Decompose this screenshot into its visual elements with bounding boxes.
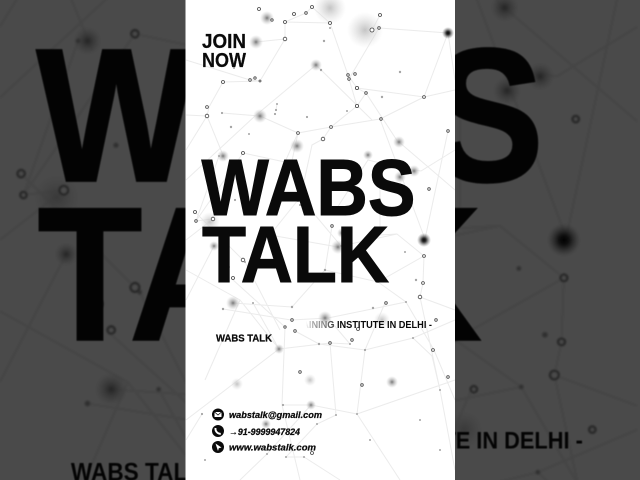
tagline: fading training institute text: TRAINING INSTITUTE IN DELHI - bbox=[290, 320, 432, 331]
contact: phone: →91-9999947824 bbox=[229, 427, 301, 438]
panel: central white poster bbox=[186, 0, 455, 480]
heading: join now: JOIN bbox=[202, 30, 246, 53]
icon: cursor bbox=[212, 441, 224, 453]
icon: envelope bbox=[212, 408, 224, 420]
contact: email: wabstalk@gmail.com bbox=[229, 410, 323, 421]
contact list bbox=[212, 408, 323, 454]
title: wabs talk: TALK bbox=[202, 210, 389, 299]
contact: website: www.wabstalk.com bbox=[229, 442, 317, 454]
blurred darkened background: TALK bbox=[38, 169, 481, 381]
icon: phone bbox=[212, 425, 224, 437]
title: wabs talk: WABS bbox=[202, 143, 416, 232]
blurred darkened background: TRAINING INSTITUTE IN DELHI - bbox=[246, 429, 583, 455]
label: wabs talk small: WABS TALK bbox=[216, 332, 272, 344]
title: wabs talk bbox=[201, 159, 414, 282]
blurred darkened background: WABS bbox=[37, 10, 544, 222]
heading: join now bbox=[202, 34, 246, 68]
heading: join now: NOW bbox=[202, 49, 247, 72]
